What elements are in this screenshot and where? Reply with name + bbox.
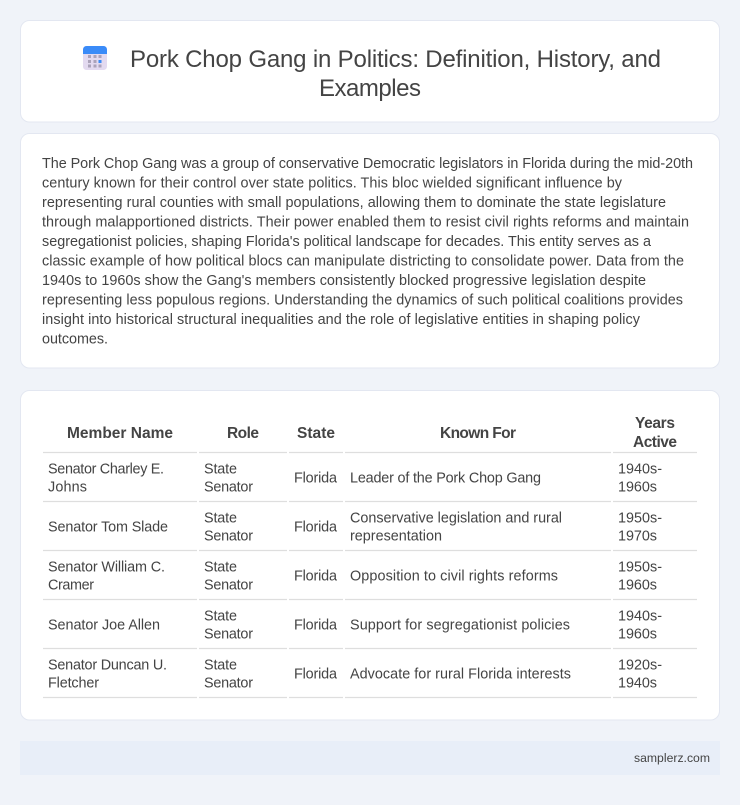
table row: Tom Slade: 1970s — [618, 529, 657, 545]
table row: Charley E. Johns: Senator — [204, 480, 253, 496]
table row: Tom Slade: Conservative legislation and rural — [350, 511, 562, 527]
table row: Tom Slade: Senator Tom Slade — [48, 520, 168, 536]
table row: Charley E. Johns: Leader of the Pork Chop Gang — [350, 471, 541, 487]
table row: Duncan U. Fletcher: Senator Duncan U. — [48, 658, 167, 674]
table row: Tom Slade — [48, 511, 662, 545]
table row: Tom Slade: Senator — [204, 529, 253, 545]
table row: Charley E. Johns: Johns — [48, 480, 87, 496]
table row: Joe Allen: Support for segregationist policies — [350, 618, 570, 634]
text block: description paragraph — [42, 156, 693, 348]
table row: Charley E. Johns: 1960s — [618, 480, 657, 496]
footer: samplerz.com — [634, 751, 710, 765]
table row: Joe Allen: Senator — [204, 627, 253, 643]
text block: description paragraph: insight into historical structural inequalities and the role of legislative entities in shaping policy — [42, 312, 641, 328]
table row: Tom Slade: 1950s- — [618, 511, 662, 527]
table row: Joe Allen: Senator Joe Allen — [48, 618, 160, 634]
table row: Tom Slade: Florida — [294, 520, 337, 536]
table row: Duncan U. Fletcher: Fletcher — [48, 676, 99, 692]
table row: Tom Slade: representation — [350, 529, 442, 545]
table row: William C. Cramer: State — [204, 560, 237, 576]
panel: members table — [20, 390, 720, 720]
table row: Duncan U. Fletcher: 1940s — [618, 676, 657, 692]
table header row: Member Name — [67, 425, 173, 442]
table row: Joe Allen — [48, 609, 662, 643]
text block: description paragraph: segregationist policies, shaping Florida's political landscape for decades. This entity serves as a — [42, 234, 651, 250]
table row: Charley E. Johns: Florida — [294, 471, 337, 487]
table row: Duncan U. Fletcher — [48, 658, 662, 692]
table row: Joe Allen: Florida — [294, 618, 337, 634]
text block: description paragraph: outcomes. — [42, 332, 108, 348]
footer — [20, 741, 720, 775]
table header row: Years — [635, 415, 675, 432]
table row: William C. Cramer: 1950s- — [618, 560, 662, 576]
text block: description paragraph: The Pork Chop Gang was a group of conservative Democratic legislators in Florida during the mid-20th — [42, 156, 693, 172]
table row: William C. Cramer: 1960s — [618, 578, 657, 594]
title — [130, 46, 661, 102]
text block: description paragraph: representing rural counties with small populations, allowing them to dominate the state legislature — [42, 195, 666, 211]
table row: William C. Cramer: Senator William C. — [48, 560, 165, 576]
table row: Joe Allen: 1960s — [618, 627, 657, 643]
table row: Joe Allen: 1940s- — [618, 609, 662, 625]
panel: header — [20, 20, 720, 122]
title: Examples — [319, 75, 421, 102]
table row: Charley E. Johns: 1940s- — [618, 462, 662, 478]
table row: Duncan U. Fletcher: Senator — [204, 676, 253, 692]
table row: William C. Cramer — [48, 560, 662, 594]
table row: Charley E. Johns — [48, 462, 662, 496]
table row: Tom Slade: State — [204, 511, 237, 527]
panel: description — [20, 134, 720, 368]
table header row — [67, 415, 677, 451]
table row: Duncan U. Fletcher: State — [204, 658, 237, 674]
table row: Joe Allen: State — [204, 609, 237, 625]
text block: description paragraph: 1940s to 1960s show the Gang's members consistently blocked progressive legislation despite — [42, 273, 646, 289]
table row: Charley E. Johns: State — [204, 462, 237, 478]
icon: calendar — [83, 46, 107, 70]
table row: Charley E. Johns: Senator Charley E. — [48, 462, 164, 478]
table row: William C. Cramer: Cramer — [48, 578, 94, 594]
table header row: State — [297, 425, 335, 442]
table header row: Active — [633, 434, 677, 451]
table row: Duncan U. Fletcher: Florida — [294, 667, 337, 683]
text block: description paragraph: century known for their control over state politics. This bloc wielded significant influence by — [42, 176, 623, 192]
text block: description paragraph: representing less populous regions. Understanding the dynamics of such political coalitions provides — [42, 292, 683, 308]
table row: William C. Cramer: Senator — [204, 578, 253, 594]
title: Pork Chop Gang in Politics: Definition, History, and — [130, 46, 661, 73]
table row: William C. Cramer: Florida — [294, 569, 337, 585]
table row: Duncan U. Fletcher: Advocate for rural Florida interests — [350, 667, 571, 683]
text block: description paragraph: through malapportioned districts. Their power enabled them to resist civil rights reforms and maintain — [42, 214, 689, 230]
table row: William C. Cramer: Opposition to civil rights reforms — [350, 569, 558, 585]
text block: description paragraph: classic example of how political blocs can manipulate districting to consolidate power. Data from the — [42, 254, 684, 270]
table header row: Role — [227, 425, 259, 442]
table row: Duncan U. Fletcher: 1920s- — [618, 658, 662, 674]
table header row: Known For — [440, 425, 516, 442]
